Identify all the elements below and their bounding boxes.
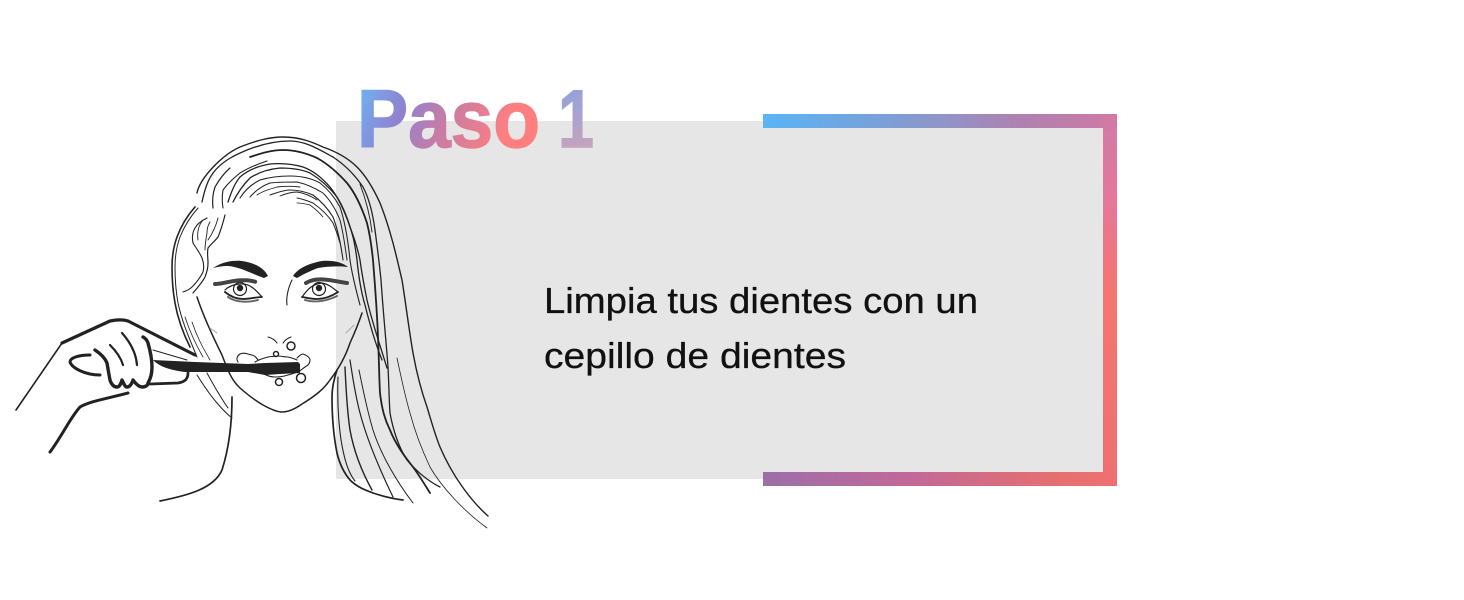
face outline [197,297,362,412]
hair: crown and long right strands [197,137,488,528]
body text: Limpia tus dientes con un [544,280,978,321]
illustration: woman brushing her teeth [16,137,488,528]
toothbrush [150,360,300,384]
body text: cepillo de dientes [544,335,846,376]
bubbles [274,342,306,386]
left eye [215,280,262,302]
hair: lower right strands [332,360,413,503]
gradient frame [763,114,1117,486]
eyebrows [213,261,348,278]
grey text panel [336,121,1103,479]
right eye [302,279,347,301]
hair: left side [172,207,232,418]
neck [160,397,232,501]
heading: Paso 1: 1 [558,74,594,165]
heading: Paso 1: Paso [357,74,540,165]
foam and lips [237,353,310,377]
body text [544,280,978,376]
cheek marks [210,325,354,333]
hand and arm [16,320,195,452]
nose [268,280,292,343]
